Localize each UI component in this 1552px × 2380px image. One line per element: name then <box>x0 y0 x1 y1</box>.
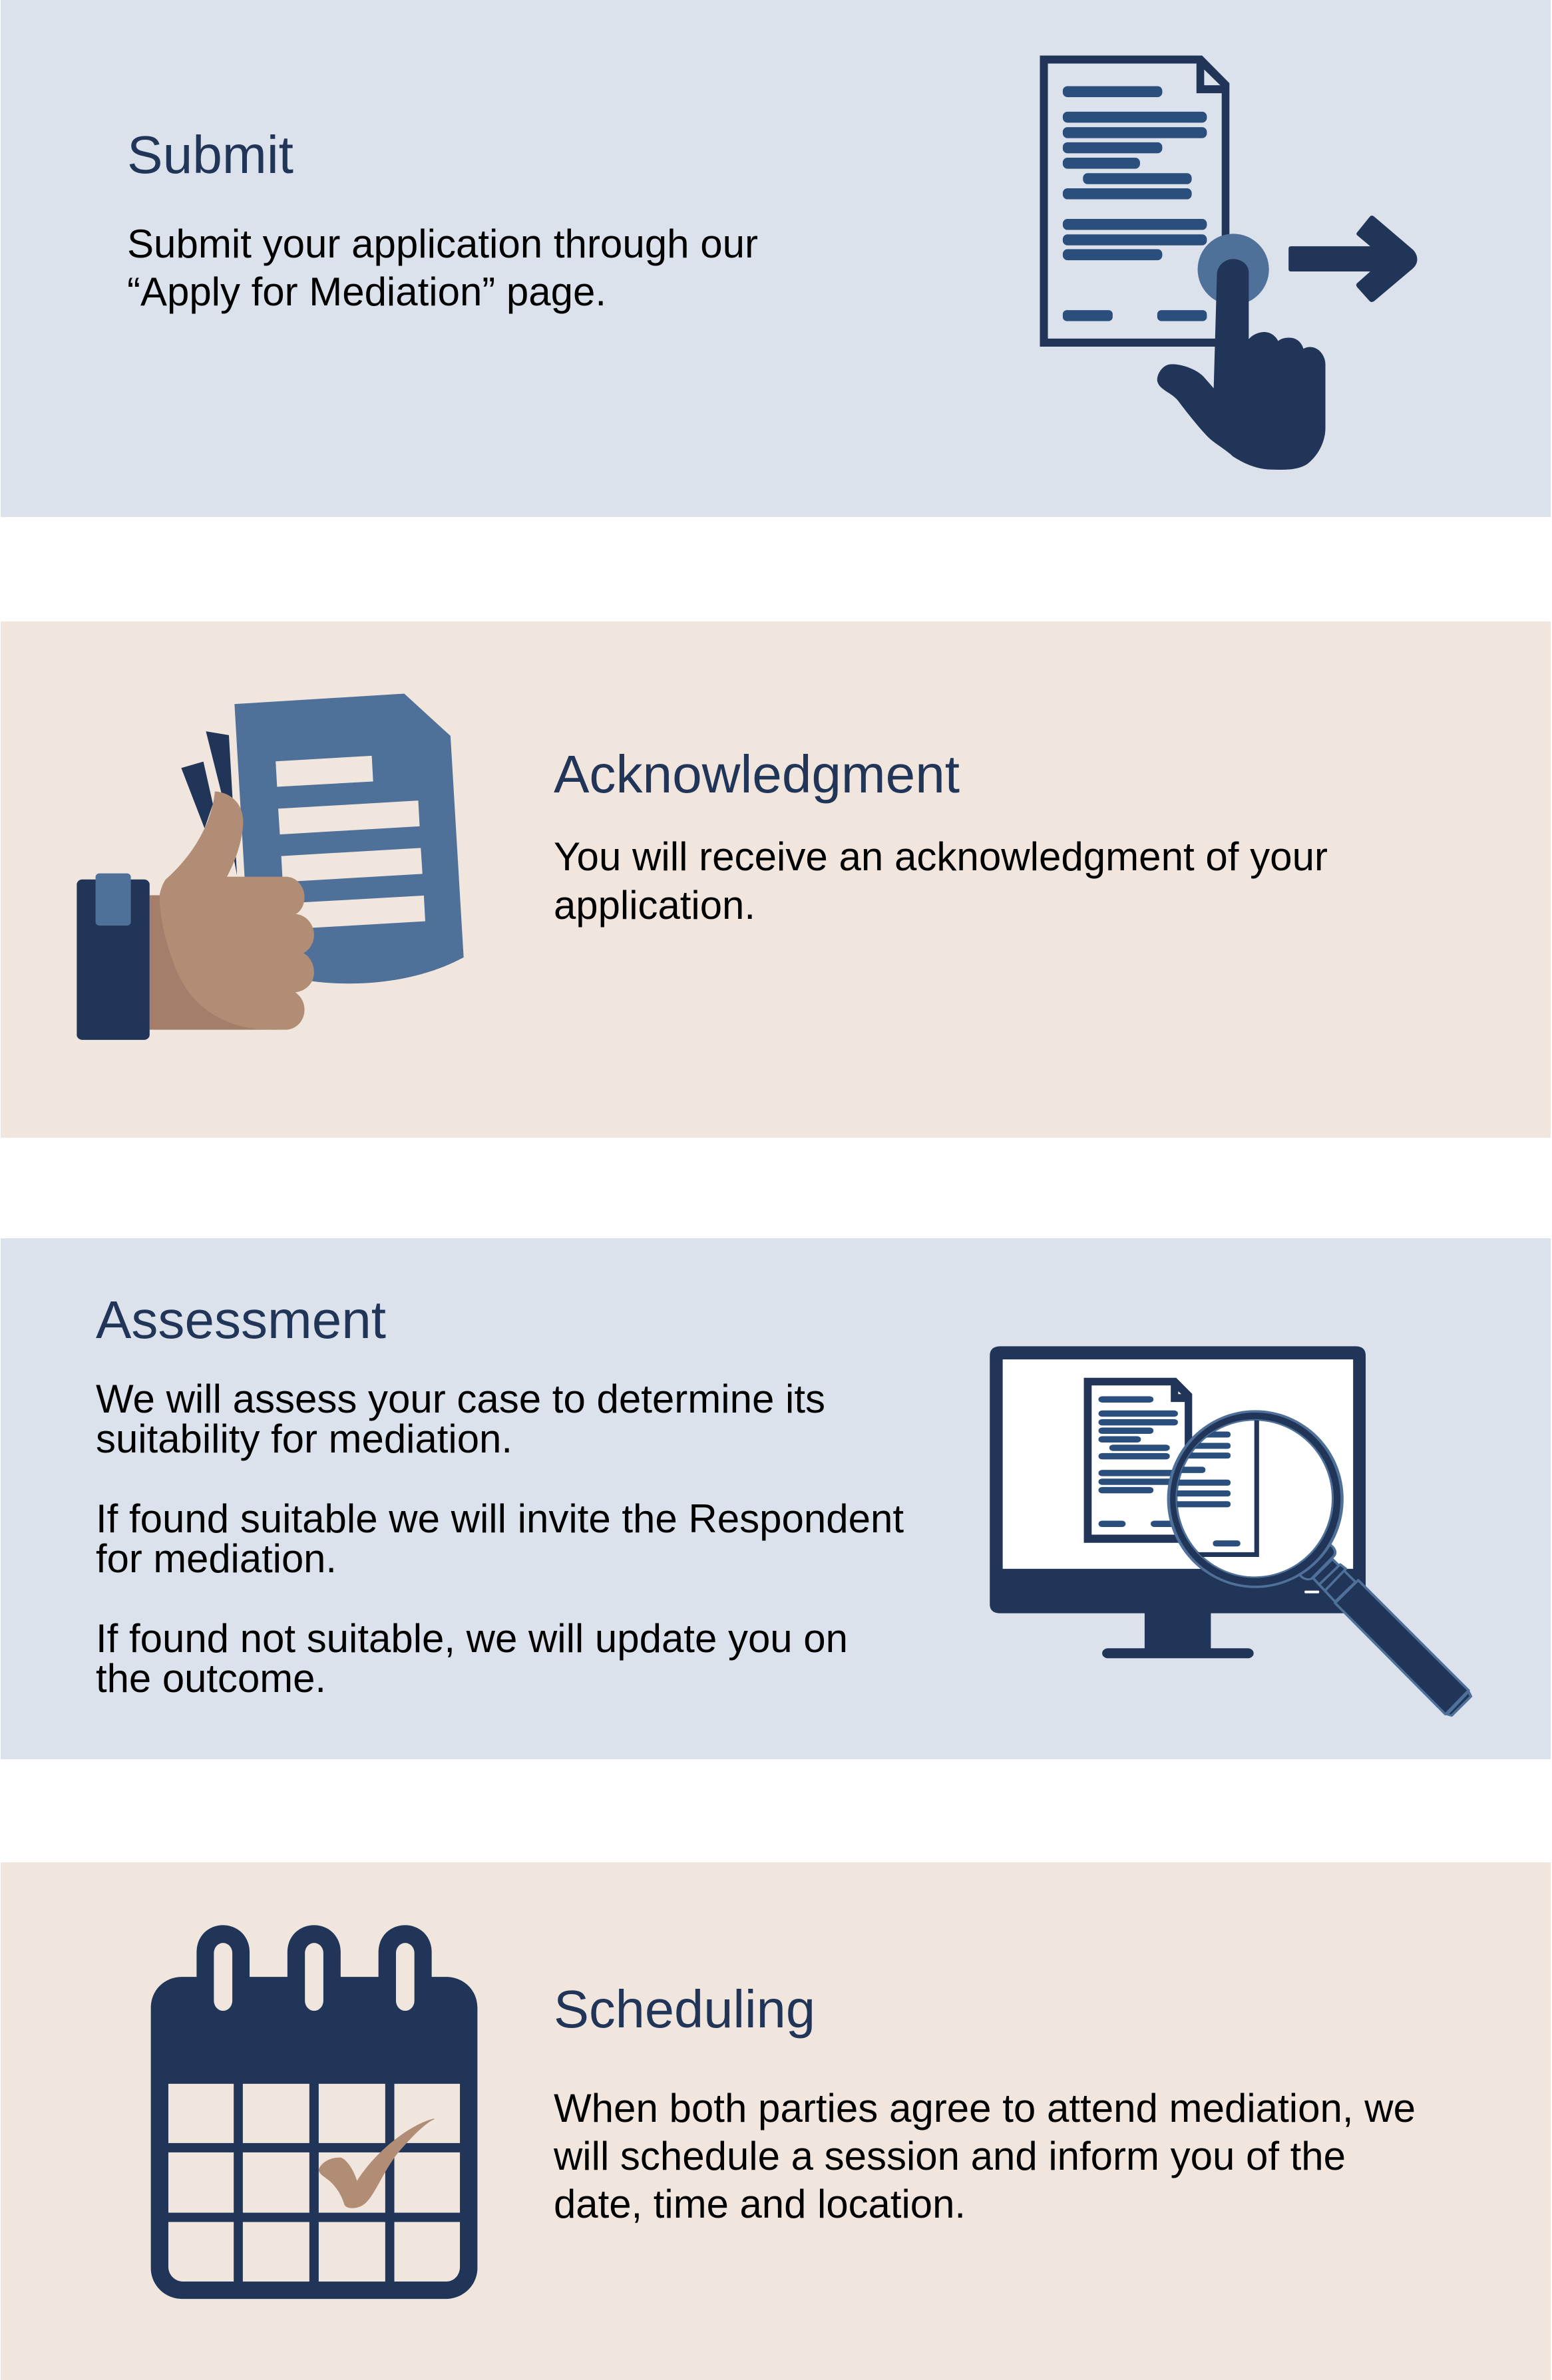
text block: scheduling description: will schedule a session and inform you of the <box>553 2134 1346 2178</box>
text block: acknowledgment description: You will receive an acknowledgment of your <box>554 834 1328 879</box>
text block: assessment description: for mediation. <box>96 1536 337 1581</box>
icon: calendar with check mark <box>151 1925 477 2299</box>
text block: scheduling description <box>553 2086 1416 2226</box>
text block: assessment description: If found not suitable, we will update you on <box>96 1616 848 1661</box>
icon: document outline <box>1040 55 1229 347</box>
heading: assessment: Assessment <box>96 1290 386 1349</box>
icon: forearm <box>150 896 278 1030</box>
text block: submit description: Submit your application through our <box>127 222 758 266</box>
icon: screen power light <box>1304 1591 1319 1594</box>
icon: magnifier handle <box>1300 1544 1471 1715</box>
heading: scheduling: Scheduling <box>554 1979 815 2039</box>
icon: magnifier rim <box>1167 1410 1344 1588</box>
icon: thumbs up hand <box>160 791 314 1030</box>
icon: document tapped by a hand with arrow <box>1040 55 1417 470</box>
icon: right arrow <box>1288 216 1417 302</box>
icon: document text lines <box>1063 86 1207 321</box>
text block: scheduling description: When both parties agree to attend mediation, we <box>554 2086 1416 2130</box>
icon: document lines on screen <box>1099 1396 1180 1527</box>
text block: assessment description: the outcome. <box>96 1656 326 1701</box>
text block: submit description <box>127 222 758 314</box>
icon: binder holes <box>214 1943 415 2011</box>
icon: pointing hand <box>1157 259 1326 470</box>
icon: touch ripple <box>1198 234 1269 305</box>
icon: magnified document <box>1177 1420 1259 1557</box>
icon: sleeve cuff <box>77 880 150 1040</box>
panel: acknowledgment <box>1 621 1551 1138</box>
icon: monitor with magnifying glass over document <box>990 1346 1471 1715</box>
heading: submit: Submit <box>127 125 293 184</box>
text block: assessment description: We will assess your case to determine its <box>96 1377 825 1421</box>
text block: assessment description <box>96 1377 904 1701</box>
icon: document outline on screen <box>1084 1378 1192 1543</box>
text block: assessment description: If found suitable we will invite the Respondent <box>96 1496 904 1541</box>
icon: monitor <box>990 1346 1366 1658</box>
heading: acknowledgment: Acknowledgment <box>554 745 960 804</box>
text block: submit description: “Apply for Mediation” page. <box>127 269 606 314</box>
icon: document bars <box>276 756 425 930</box>
text block: acknowledgment description: application. <box>554 883 755 928</box>
text block: scheduling description: date, time and location. <box>554 2182 966 2226</box>
icon: back sheets <box>181 731 237 876</box>
icon: calendar grid <box>168 2084 460 2282</box>
panel: submit <box>1 0 1551 517</box>
text block: assessment description: suitability for mediation. <box>96 1417 512 1461</box>
icon: thumbs up holding document <box>77 693 464 1040</box>
icon: check mark <box>319 2119 434 2208</box>
icon: front document <box>234 693 464 983</box>
icon: calendar body <box>151 1925 477 2299</box>
text block: acknowledgment description <box>554 834 1328 928</box>
icon: cuff tab <box>96 874 131 926</box>
icon: monitor screen <box>1003 1359 1353 1569</box>
panel: scheduling <box>1 1862 1551 2380</box>
panel: assessment <box>1 1238 1551 1759</box>
